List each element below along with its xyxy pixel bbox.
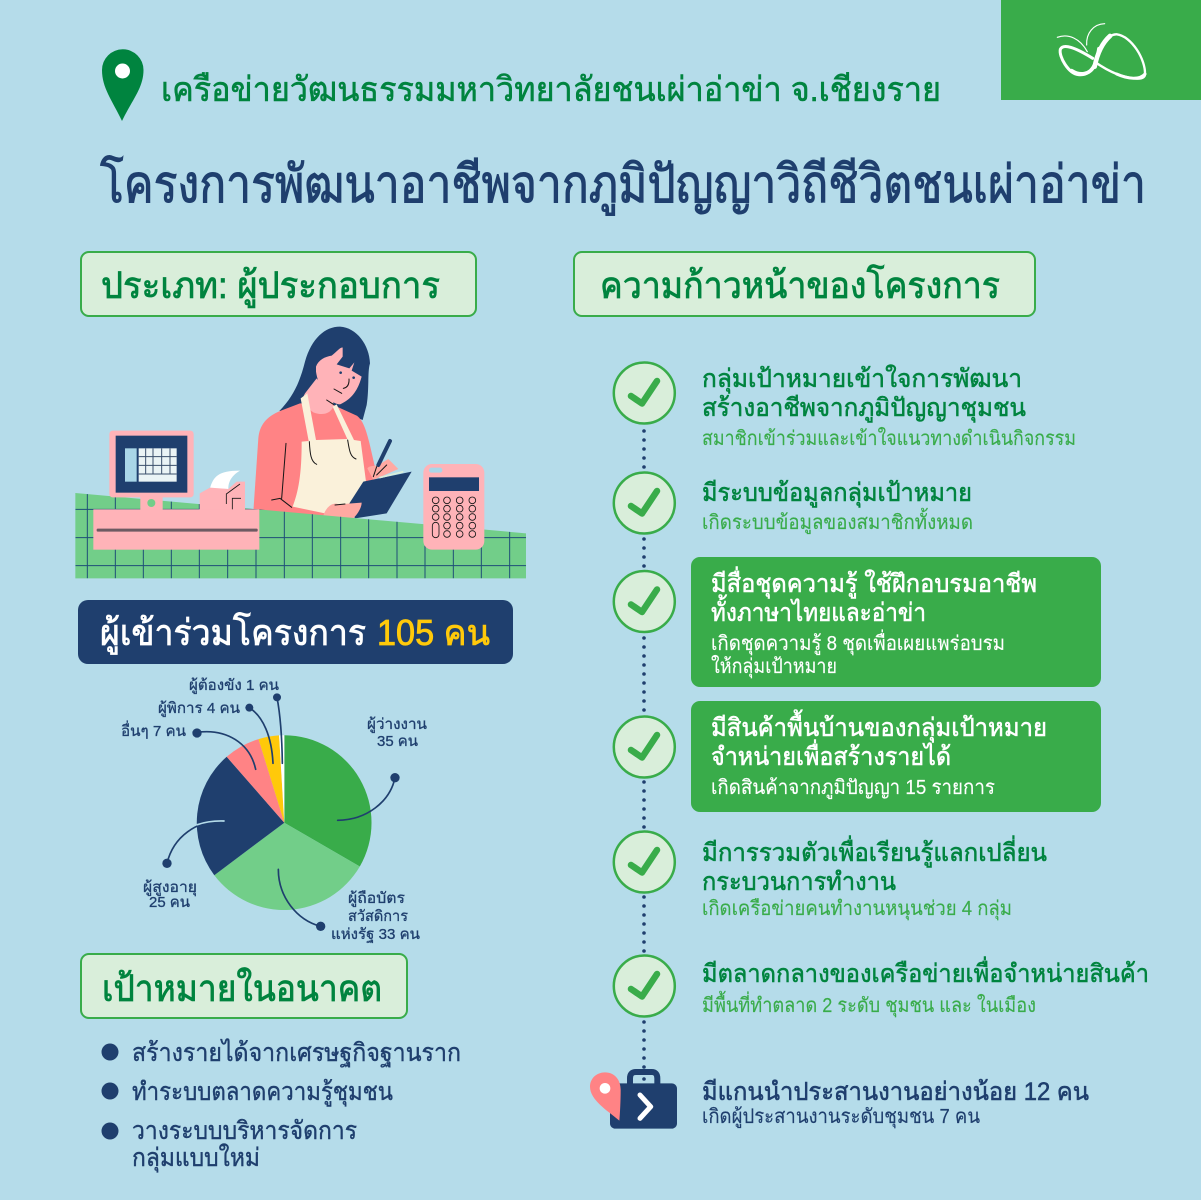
panel: progress item 3: มีสื่อชุดความรู้ ใช้ฝึกอบรมอาชีพ [711,566,1037,599]
list: future goals: กลุ่มแบบใหม่ [132,1143,260,1173]
icon: check 5 [614,832,675,892]
organisation heading: เครือข่ายวัฒนธรรมมหาวิทยาลัยชนเผ่าอ่าข่า จ.เชียงราย [161,71,941,109]
heading: type [81,252,476,316]
progress item 5 [702,835,1047,921]
progress item 1: กลุ่มเป้าหมายเข้าใจการพัฒนา [702,364,1022,394]
icon: check 6 [614,956,675,1016]
heading: future goals: เป้าหมายในอนาคต [102,967,382,1009]
banner: participants: ผู้เข้าร่วมโครงการ [100,612,366,655]
icon: check 1 [614,362,675,424]
logo panel [1001,0,1201,100]
panel: progress item 4: จำหน่ายเพื่อสร้างรายได้ [711,739,951,771]
progress item 7 [702,1078,1089,1129]
pie labels: ผู้ต้องขัง 1 คน [189,677,279,694]
icon: check 4 [614,716,675,778]
receipt printer [200,471,245,513]
pie labels: ผู้ว่างงาน [367,716,427,733]
pie labels: ผู้ถือบัตร [348,890,405,907]
counter [93,509,259,550]
heading: future goals [81,954,407,1018]
calculator [423,464,484,550]
panel: progress item 4: เกิดสินค้าจากภูมิปัญญา 15 รายการ [711,777,995,800]
list: future goals [102,1038,461,1173]
panel: progress item 3 [691,557,1101,687]
progress item 5: เกิดเครือข่ายคนทำงานหนุนช่วย 4 กลุ่ม [702,898,1012,921]
panel: progress item 4: มีสินค้าพื้นบ้านของกลุ่มเป้าหมาย [711,709,1047,743]
panel: progress item 4 [691,701,1101,812]
heading: type: ประเภท: ผู้ประกอบการ [101,265,440,308]
panel: progress item 3: เกิดชุดความรู้ 8 ชุดเพื่อเผยแพร่อบรม [711,629,1005,656]
icon: check 2 [614,472,675,534]
banner: participants: 105 คน [377,612,490,653]
progress item 7: เกิดผู้ประสานงานระดับชุมชน 7 คน [702,1106,980,1129]
progress item 1 [702,364,1076,450]
list: future goals: สร้างรายได้จากเศรษฐกิจฐานราก [132,1038,461,1067]
woman [253,327,412,520]
pie labels: สวัสดิการ [348,908,408,925]
progress item 5: กระบวนการทำงาน [702,868,896,896]
progress item 2 [702,479,973,535]
pie chart: participant groups [197,735,372,910]
progress item 6: มีตลาดกลางของเครือข่ายเพื่อจำหน่ายสินค้า [702,956,1149,988]
pie labels: ผู้สูงอายุ [143,879,197,897]
pie labels: ผู้พิการ 4 คน [158,700,240,717]
list: future goals: วางระบบบริหารจัดการ [132,1117,357,1145]
progress item 2: มีระบบข้อมูลกลุ่มเป้าหมาย [702,479,972,508]
progress item 1: สมาชิกเข้าร่วมและเข้าใจแนวทางดำเนินกิจกรรม [702,427,1076,450]
banner: participants [78,600,513,664]
progress item 2: เกิดระบบข้อมูลของสมาชิกทั้งหมด [702,508,973,535]
pie leader lines [162,693,400,931]
heading: progress: ความก้าวหน้าของโครงการ [600,264,1000,306]
illustration: shop worker at cash register [75,327,526,578]
progress item 6 [702,956,1149,1018]
progress item 6: มีพื้นที่ทำตลาด 2 ระดับ ชุมชน และ ในเมือง [702,991,1036,1018]
heading: progress [574,252,1035,316]
cash register monitor [109,431,194,513]
pie labels: แห่งรัฐ 33 คน [331,926,420,943]
progress item 5: มีการรวมตัวเพื่อเรียนรู้แลกเปลี่ยน [702,835,1047,868]
icon: location pin [102,49,144,121]
icon: check 3 [614,571,675,632]
pie labels: อื่นๆ 7 คน [121,720,186,740]
pie labels [121,677,427,943]
icon: briefcase with map pin [590,1072,677,1129]
dotted timeline [642,429,646,1081]
pie labels: 35 คน [377,733,418,750]
pie labels: 25 คน [149,894,190,911]
panel: progress item 3: ทั้งภาษาไทยและอ่าข่า [711,594,926,627]
tablecloth [75,487,526,578]
progress item 7: มีแกนนำประสานงานอย่างน้อย 12 คน [702,1078,1089,1106]
panel: progress item 3: ให้กลุ่มเป้าหมาย [711,655,837,679]
list: future goals: ทำระบบตลาดความรู้ชุมชน [132,1078,393,1107]
progress item 1: สร้างอาชีพจากภูมิปัญญาชุมชน [702,394,1026,423]
